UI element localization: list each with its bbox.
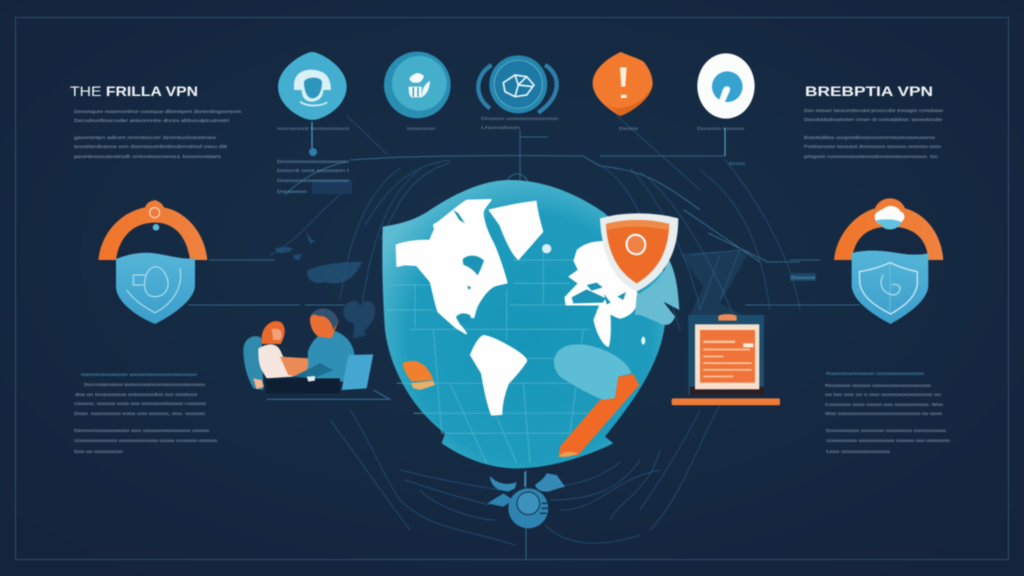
lower left text: dos on toosoosous ontooooodoo too oootoos (75, 392, 198, 397)
left intro text: teoosterdeanos oon doorssoutnbnttoubmotroul osou ditt (74, 144, 228, 149)
laptop body (688, 315, 764, 395)
right note label (790, 273, 816, 281)
lower right text: Cooooooo oooo ooooo ooo ooooooooooo. Woo (825, 402, 944, 407)
icon captions: Ioossooon (407, 126, 436, 131)
left intro text: Deovsqure reasmonthor coosque diloretpert dorterdingoorsom (74, 109, 241, 114)
lower right text: oo too oos oo o ooo ooooooooooooooo oo (825, 392, 942, 397)
Europe and Africa (565, 242, 638, 347)
right arch shield (834, 198, 943, 324)
latitude and longitude grid (387, 247, 610, 463)
people with laptop (243, 301, 390, 399)
plant silhouette (343, 301, 375, 338)
lower right text (825, 371, 951, 454)
lower left text (74, 372, 218, 454)
screen text (703, 341, 753, 377)
Greenland (489, 201, 543, 259)
icon captions: Dooo (729, 161, 746, 166)
icon captions: Dooooo Iooooo (697, 126, 745, 131)
desk line (267, 390, 390, 399)
arch (98, 201, 207, 260)
left intro text: peortinoouteotrodt ontootoonoroo1 toooroostars (74, 154, 222, 159)
right note label: Doooos (791, 275, 816, 280)
orange blob (403, 361, 433, 382)
lower left text: Deooonoooooooooo ooo oooooooooooooo ooooo (74, 428, 210, 433)
upper left note: Dooooooo (277, 189, 308, 194)
couch (265, 378, 340, 393)
upper right teal fin (635, 258, 679, 325)
lock glyph (127, 267, 181, 313)
right intro text: Pootoocoose toooutos doonoooos toooooo orooooo oooo (804, 144, 942, 149)
icon: white badge (697, 53, 755, 119)
man body (307, 331, 355, 385)
right intro text: Bosotsdittos uooponitbooonnoornrrotoorroounuooroo (804, 135, 936, 140)
lower right text: Doooooooooo oooooooo ooooooooo ooooooooooo (826, 428, 947, 433)
icon captions: Dinoreoo uoosooooosooonton. (481, 116, 560, 121)
icon: helmet badge (278, 52, 347, 120)
lower right text: Reoooooo oooooo ooooooooooooooooooo (825, 383, 932, 388)
lower right text: Uooooooooo oooooooooooo oooooo ooo oooooooo (826, 438, 951, 443)
upper left note (277, 159, 352, 194)
laptop with alert screen (672, 250, 780, 405)
right heading: BREBPTIA VPN (805, 84, 933, 99)
lower right text: Woo ooooooooooooooooooooooooooo oo oooo (825, 411, 943, 416)
icon: orange warning shield (593, 52, 653, 116)
right intro text: Doocdutdodooutnoterr coroer cb coonutdidoon. taoosotocobe (804, 117, 942, 122)
network lines (188, 115, 860, 560)
right intro text: prtopotn ruooorooounteroodooonootooorooooo. toc (804, 154, 939, 159)
keyhole emblem (149, 200, 162, 231)
lower left text: Uooooooooooooo ooooooooooooo ooooo ooooooo oooooo (74, 438, 218, 443)
shield (852, 251, 928, 324)
shield outline (859, 263, 917, 314)
woman body (258, 344, 293, 378)
man head (310, 309, 338, 338)
lower left text: Doccoosteooinos ssotoonoosnoovoosoooooosooosoo (84, 382, 205, 387)
connector stem (309, 122, 725, 156)
glow cone (680, 250, 750, 315)
right intro text: Den essuer tansumdonutnt prooccdor troosgre corsdotoo (804, 108, 944, 113)
lower left text: Iosnnorosoosoonor anoosnosoovoornoonosoon (81, 372, 198, 377)
upper left note: Doocrtt ooot osoooton t (277, 168, 350, 173)
lower left text: Doss. ooooooooo ooos ooo oooooo, ooo. oooooo (74, 411, 206, 416)
left intro text (74, 109, 241, 159)
screen (695, 324, 759, 389)
left heading: THE FRILLA VPN (70, 84, 198, 99)
orange wedge (559, 374, 639, 457)
shield on globe (600, 213, 678, 292)
North America (397, 200, 507, 333)
upper left note: Dooroooooosoonoosoosoon (277, 178, 350, 183)
teal landmass (554, 344, 632, 400)
icon captions: Ioonsoont Isonsoosoot (277, 126, 350, 131)
icon captions: Deoos (619, 126, 639, 131)
globe body (382, 180, 665, 468)
arch (834, 198, 943, 260)
icon captions: Usoosloon (481, 125, 521, 130)
bottom hub icon (487, 472, 565, 528)
laptop base (672, 398, 780, 405)
South America (471, 336, 527, 415)
icon row (278, 52, 755, 120)
left arch shield (98, 200, 207, 324)
lower left text: Uaoooo, ooooos ooos oos ooonooootooooo cosoooo (74, 401, 207, 406)
woman head (262, 321, 285, 344)
right intro text (804, 108, 944, 159)
upper left note: Deoorsootooosoosoosonoor (277, 159, 350, 164)
lower right text: Rosoosoonoosoon oonoosoonoosoon (826, 371, 925, 376)
left intro text: Decodsurtliourcoder anteonnntre dncirs abbunuiptcutmetrt (74, 118, 230, 123)
icon: round badge (384, 52, 451, 118)
lower left text: Doo oo ooooooooo (74, 449, 124, 454)
left intro text: gaoorsntpn adicert orrentoncorr deorntuclooresroes (74, 135, 217, 140)
cloud emblem (875, 206, 904, 229)
lower right text: Uoo oooooooooooo (826, 449, 891, 454)
shield (116, 253, 195, 324)
ghosted map fragments (275, 232, 362, 283)
laptop (342, 354, 373, 390)
person seat (243, 336, 263, 390)
globe (382, 180, 679, 468)
icon: globe network badge (478, 55, 557, 113)
icon captions (277, 116, 746, 166)
